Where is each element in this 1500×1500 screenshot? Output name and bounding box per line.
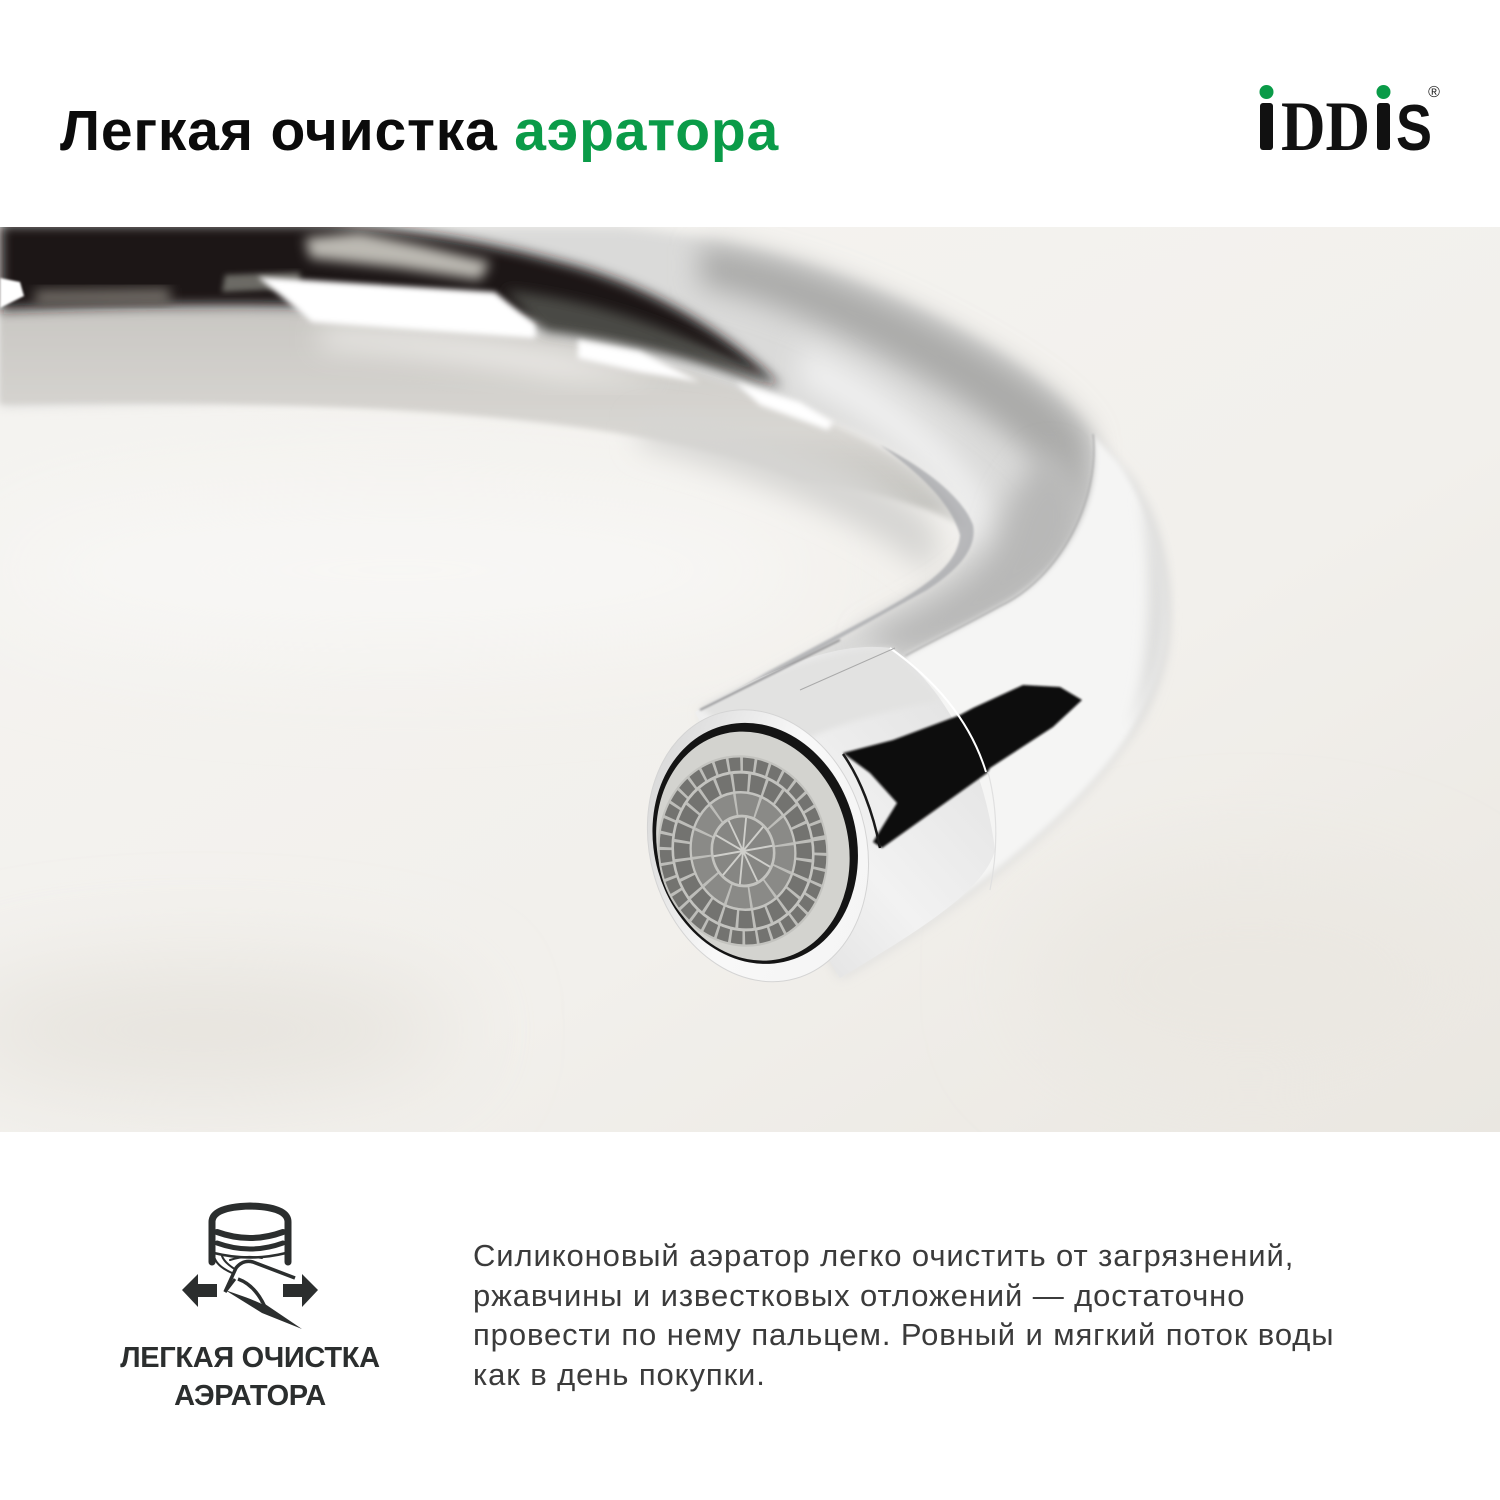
icon: aerator cleaning with finger [182, 1202, 318, 1329]
spout tube body [0, 224, 1168, 978]
description text [473, 1238, 1334, 1392]
black reflection [843, 685, 1082, 848]
icon label: ЛЕГКАЯ ОЧИСТКА [120, 1342, 380, 1374]
aerator mesh [658, 755, 828, 947]
dark reflection, upper left [0, 224, 782, 388]
grey inner band of the bend [868, 465, 1082, 656]
soft light under the highlight [320, 330, 660, 380]
description text: как в день покупки. [473, 1356, 766, 1392]
icon label: АЭРАТОРА [174, 1380, 326, 1412]
underside reflection near inner edge [638, 438, 943, 570]
logo: IDDIS: ® [1428, 84, 1440, 101]
logo: IDDIS: DD [1281, 88, 1370, 166]
outer edge tint of the bend [1136, 522, 1165, 708]
finger [225, 1261, 302, 1329]
aerator face [647, 710, 869, 982]
light middle of the bend [800, 345, 990, 550]
grey reflections in the dark band [305, 232, 490, 280]
tube highlights [258, 277, 535, 338]
nozzle collar [695, 640, 1082, 978]
description text: провести по нему пальцем. Ровный и мягкий поток воды [473, 1317, 1334, 1352]
title: Легкая очистка аэратора [60, 99, 779, 163]
inner chrome edge [744, 446, 974, 686]
icon label [120, 1342, 380, 1412]
soft surface shadows [0, 969, 395, 1088]
photo: chrome faucet spout with aerator [0, 227, 1500, 1132]
outer soft shadow of bend [700, 245, 1090, 525]
description text: ржавчины и известковых отложений — достаточно [473, 1278, 1245, 1312]
white outer part of the bend [904, 437, 1152, 896]
photo background surface [0, 227, 1500, 1132]
arrow left [182, 1274, 217, 1307]
logo: IDDIS: S [1396, 91, 1432, 164]
arrow right [283, 1274, 318, 1307]
tube upper band [0, 310, 968, 530]
logo: IDDIS [1260, 84, 1440, 166]
description text: Силиконовый аэратор легко очистить от загрязнений, [473, 1238, 1294, 1273]
aerator body [212, 1206, 288, 1276]
